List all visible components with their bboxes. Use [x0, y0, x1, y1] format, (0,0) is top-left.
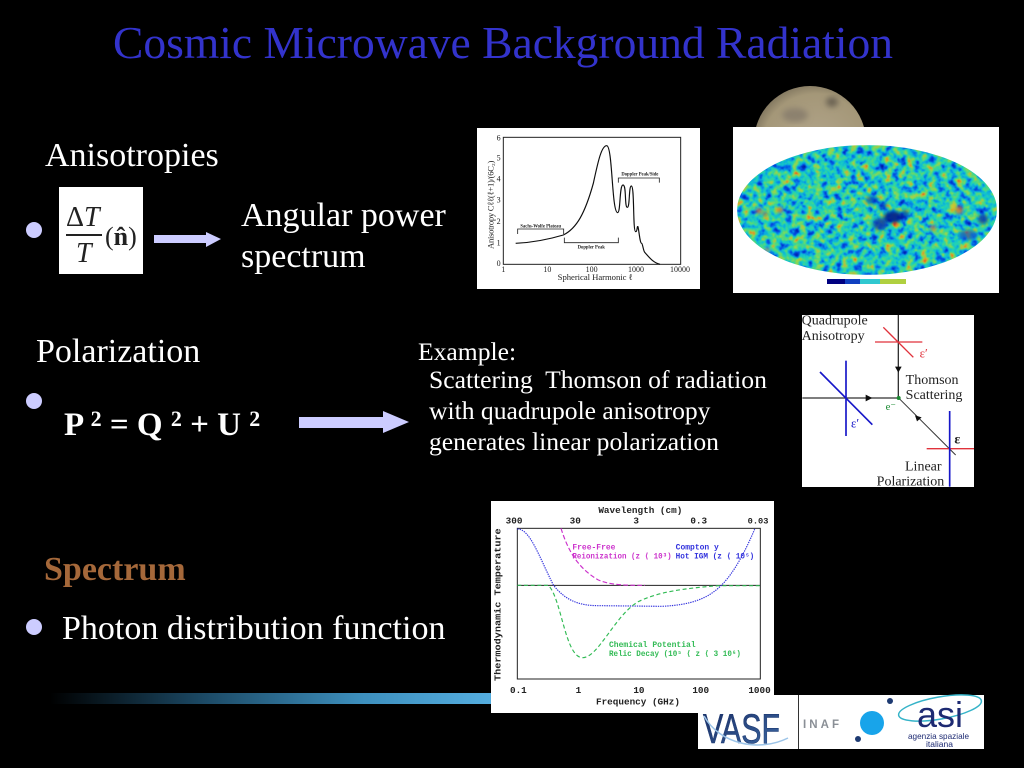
chart: angular power spectrum: 5 [497, 154, 501, 163]
logo: ASI: asi [917, 694, 963, 735]
text: photon distribution function: Photon distribution function [62, 610, 445, 647]
diagram: Thomson scattering: Quadrupole [802, 313, 868, 328]
formula: polarization: 2 [91, 406, 102, 431]
chart: CMB spectral distortions: Hot IGM (z ⟨ 10⁵) [676, 551, 754, 561]
chart: CMB spectral distortions: Wavelength (cm) [598, 505, 682, 516]
arrow: to angular power spectrum [154, 232, 221, 247]
logos: VASF, INAF, ASI [698, 690, 984, 752]
chart: angular power spectrum: Anisotropy Cℓℓ(ℓ+1)/(6C₂) [485, 161, 495, 249]
text: angular power spectrum [241, 197, 447, 275]
chart: CMB spectral distortions: 10 [633, 685, 645, 696]
chart: angular power spectrum [477, 128, 700, 289]
chart: angular power spectrum: 1 [497, 239, 501, 248]
chart: CMB spectral distortions: 0.03 [748, 517, 768, 527]
formula: polarization: + U [182, 407, 249, 443]
diagram: Thomson scattering: ε [954, 432, 960, 447]
logo: ASI [897, 690, 983, 749]
map: CMB sky anisotropy [733, 127, 999, 293]
decorative gradient bar [50, 693, 495, 704]
text: Thomson scattering example: Scattering Thomson of radiation [429, 365, 767, 394]
arrow: to Thomson scattering [299, 411, 409, 433]
diagram: Thomson scattering: ε′ [851, 416, 859, 430]
formula: polarization: = Q [102, 407, 171, 443]
diagram: Thomson scattering: Anisotropy [802, 329, 865, 344]
formula: delta T over T: ΔT [66, 202, 102, 233]
bullet: spectrum [26, 619, 42, 635]
chart: CMB spectral distortions: 3 [633, 516, 639, 527]
chart: CMB spectral distortions: 1 [576, 685, 582, 696]
chart: CMB spectral distortions: 300 [506, 516, 523, 527]
chart: angular power spectrum: 6 [497, 134, 501, 143]
heading: Spectrum: Spectrum [44, 551, 186, 588]
formula: polarization: 2 [249, 406, 260, 431]
logo: VASF: VASF [703, 705, 780, 752]
text: angular power spectrum: Angular power [241, 197, 447, 234]
chart: CMB spectral distortions: 1000 [748, 685, 771, 696]
chart: angular power spectrum: 10 [543, 265, 551, 274]
title: Cosmic Microwave Background Radiation [113, 17, 893, 68]
chart: angular power spectrum: 3 [497, 196, 501, 205]
chart: angular power spectrum: 2 [497, 217, 501, 226]
formula: delta T over T: T [76, 238, 94, 269]
formula: polarization: P [64, 407, 82, 443]
chart: CMB spectral distortions: 100 [692, 685, 710, 696]
chart: CMB spectral distortions: Chemical Potential [609, 641, 696, 650]
diagram: Thomson scattering: Linear [905, 460, 942, 475]
heading: Anisotropies: Anisotropies [45, 137, 219, 174]
chart: angular power spectrum: Spherical Harmonic ℓ [558, 272, 633, 282]
logo: INAF [803, 698, 893, 742]
formula: delta T over T: (n̂) [105, 222, 137, 251]
chart: angular power spectrum: 10000 [670, 265, 690, 274]
heading: Polarization: Polarization [36, 333, 200, 370]
chart: angular power spectrum: 0 [497, 259, 501, 268]
diagram: Thomson scattering [802, 313, 975, 490]
icon: moon [754, 86, 866, 198]
diagram: Thomson scattering: Polarization [877, 475, 944, 490]
text: angular power spectrum: spectrum [241, 238, 366, 275]
chart: angular power spectrum: Sachs-Wolfe Plateau [520, 225, 561, 230]
diagram: Thomson scattering: Thomson [906, 373, 959, 388]
text: Thomson scattering example: with quadrupole anisotropy [429, 396, 711, 425]
bullet: polarization [26, 393, 42, 409]
chart: CMB spectral distortions: Compton y [676, 543, 719, 552]
chart: CMB spectral distortions [491, 501, 774, 713]
chart: CMB spectral distortions: Relic Decay (10⁵ ⟨ z ⟨ 3 10⁶) [609, 649, 741, 659]
chart: angular power spectrum: 4 [497, 175, 501, 184]
chart: CMB spectral distortions: 30 [570, 516, 581, 527]
logo: INAF: INAF [803, 719, 839, 731]
chart: CMB spectral distortions: Frequency (GHz) [596, 696, 680, 707]
diagram: Thomson scattering: e⁻ [886, 402, 896, 413]
chart: angular power spectrum: 1000 [628, 265, 644, 274]
logo: ASI: agenzia spaziale [908, 731, 969, 741]
bullet: anisotropies [26, 222, 42, 238]
chart: CMB spectral distortions: Thermodynamic Temperature [493, 528, 504, 681]
text: Thomson scattering example [418, 337, 767, 456]
chart: CMB spectral distortions: 0.3 [690, 516, 708, 527]
formula: polarization: 2 [171, 406, 182, 431]
chart: CMB spectral distortions: Free-Free [572, 543, 616, 552]
diagram: Thomson scattering: Scattering [906, 388, 962, 403]
chart: angular power spectrum: 100 [586, 265, 598, 274]
logo: ASI: italiana [926, 740, 954, 749]
chart: CMB spectral distortions: 0.1 [510, 685, 527, 696]
diagram: Thomson scattering: ε′ [920, 347, 928, 361]
chart: angular power spectrum: 1 [501, 265, 505, 274]
chart: angular power spectrum: Doppler Peak [578, 246, 605, 251]
chart: CMB spectral distortions: Reionization (z ⟨ 10³) [572, 551, 672, 561]
formula: delta T over T [59, 187, 143, 274]
chart: angular power spectrum: Doppler Peak/Side [621, 173, 658, 178]
text: Thomson scattering example: generates linear polarization [429, 427, 719, 456]
text: Thomson scattering example: Example: [418, 337, 516, 366]
